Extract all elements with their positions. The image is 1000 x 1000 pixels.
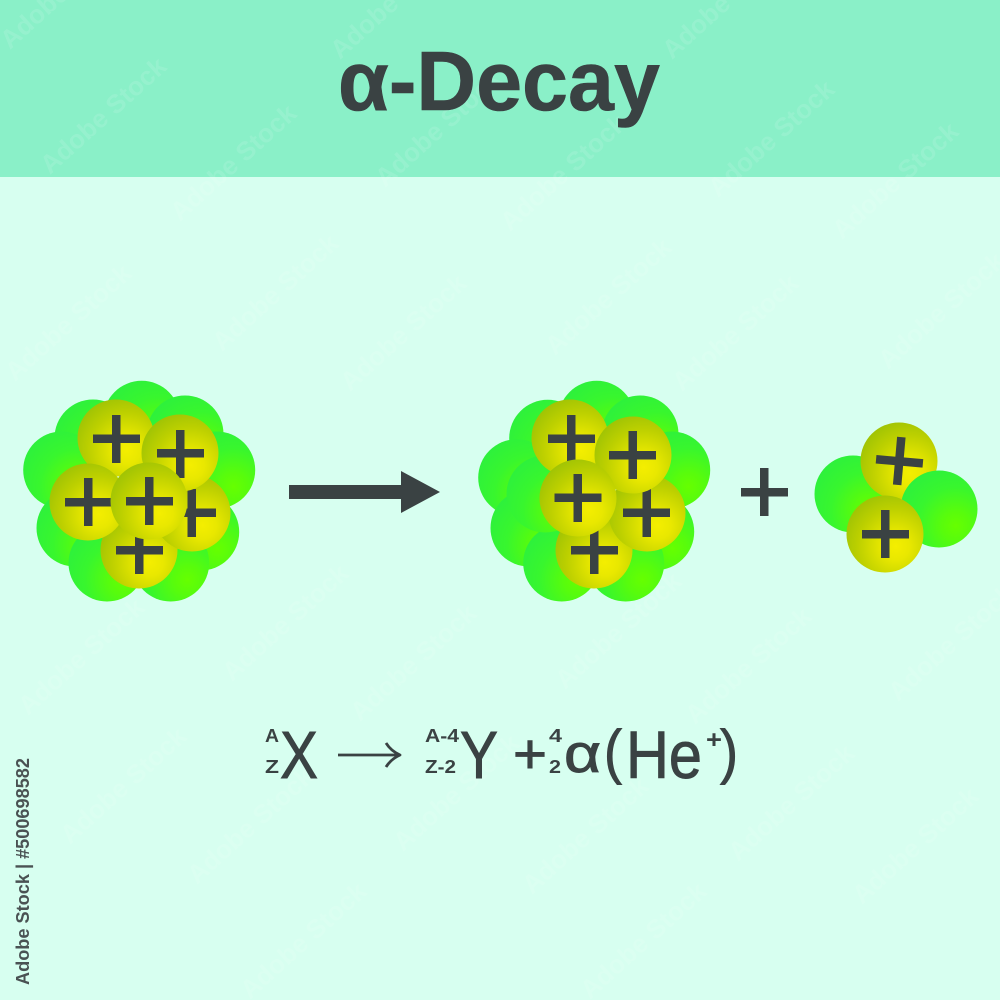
proton xyxy=(50,464,126,540)
watermark pattern: Adobe Stock xyxy=(549,565,688,694)
watermark pattern: Adobe Stock xyxy=(54,720,193,849)
watermark pattern: Adobe Stock xyxy=(216,557,355,686)
watermark pattern: Adobe Stock xyxy=(666,267,805,396)
decay equation: ) xyxy=(720,718,738,785)
parent nucleus xyxy=(23,381,255,602)
proton xyxy=(100,512,178,588)
watermark pattern: Adobe Stock xyxy=(0,257,138,386)
equation arrow xyxy=(338,743,400,767)
proton xyxy=(78,400,154,476)
proton xyxy=(594,416,672,494)
neutron xyxy=(814,456,892,532)
decay equation: α xyxy=(564,724,601,784)
watermark pattern: Adobe Stock xyxy=(846,780,985,909)
decay equation: Y xyxy=(460,718,498,793)
proton xyxy=(154,474,230,552)
watermark pattern: Adobe Stock xyxy=(12,591,151,720)
decay equation: + xyxy=(513,722,547,785)
plus sign xyxy=(741,468,788,516)
neutrons of daughter nucleus xyxy=(478,381,710,602)
reaction arrow xyxy=(289,471,440,513)
proton xyxy=(608,474,686,552)
proton xyxy=(110,462,188,540)
title: α-Decay xyxy=(338,34,660,128)
watermark pattern: Adobe Stock xyxy=(722,737,861,866)
decay equation: A xyxy=(265,726,279,746)
proton xyxy=(532,400,608,476)
watermark pattern: Adobe Stock xyxy=(826,115,965,244)
proton xyxy=(540,460,616,536)
watermark pattern: Adobe Stock xyxy=(494,107,633,236)
watermark pattern: Adobe Stock xyxy=(369,63,508,192)
watermark pattern: Adobe Stock xyxy=(164,97,303,226)
watermark pattern: Adobe Stock xyxy=(206,227,345,356)
decay equation: + xyxy=(706,726,722,754)
watermark pattern: Adobe Stock xyxy=(34,50,173,179)
watermark pattern: Adobe Stock xyxy=(181,760,320,889)
decay equation: A-4 xyxy=(425,726,459,746)
decay equation: ( xyxy=(604,718,622,785)
alpha particle xyxy=(814,422,978,572)
neutrons of parent nucleus xyxy=(23,381,255,602)
watermark pattern: Adobe Stock xyxy=(516,770,655,899)
decay equation: Z xyxy=(265,757,279,777)
header band xyxy=(0,0,1000,177)
decay equation: 4 xyxy=(549,726,562,746)
decay equation: Z-2 xyxy=(425,757,456,777)
watermark pattern: Adobe Stock xyxy=(344,597,483,726)
proton xyxy=(142,414,218,492)
decay equation xyxy=(265,718,738,793)
watermark pattern: Adobe Stock xyxy=(702,73,841,202)
neutron xyxy=(900,470,978,548)
proton xyxy=(846,496,924,572)
watermark pattern: Adobe Stock xyxy=(387,727,526,856)
proton xyxy=(556,512,632,588)
watermark pattern: Adobe Stock xyxy=(539,231,678,360)
decay equation: 2 xyxy=(549,757,561,777)
proton xyxy=(860,422,938,500)
daughter nucleus xyxy=(478,381,710,602)
stock id label: Adobe Stock | #500698582 xyxy=(13,758,33,985)
decay equation: X xyxy=(280,718,318,793)
watermark pattern: Adobe Stock xyxy=(679,600,818,729)
watermark pattern: Adobe Stock xyxy=(334,267,473,396)
decay equation: He xyxy=(626,718,702,793)
